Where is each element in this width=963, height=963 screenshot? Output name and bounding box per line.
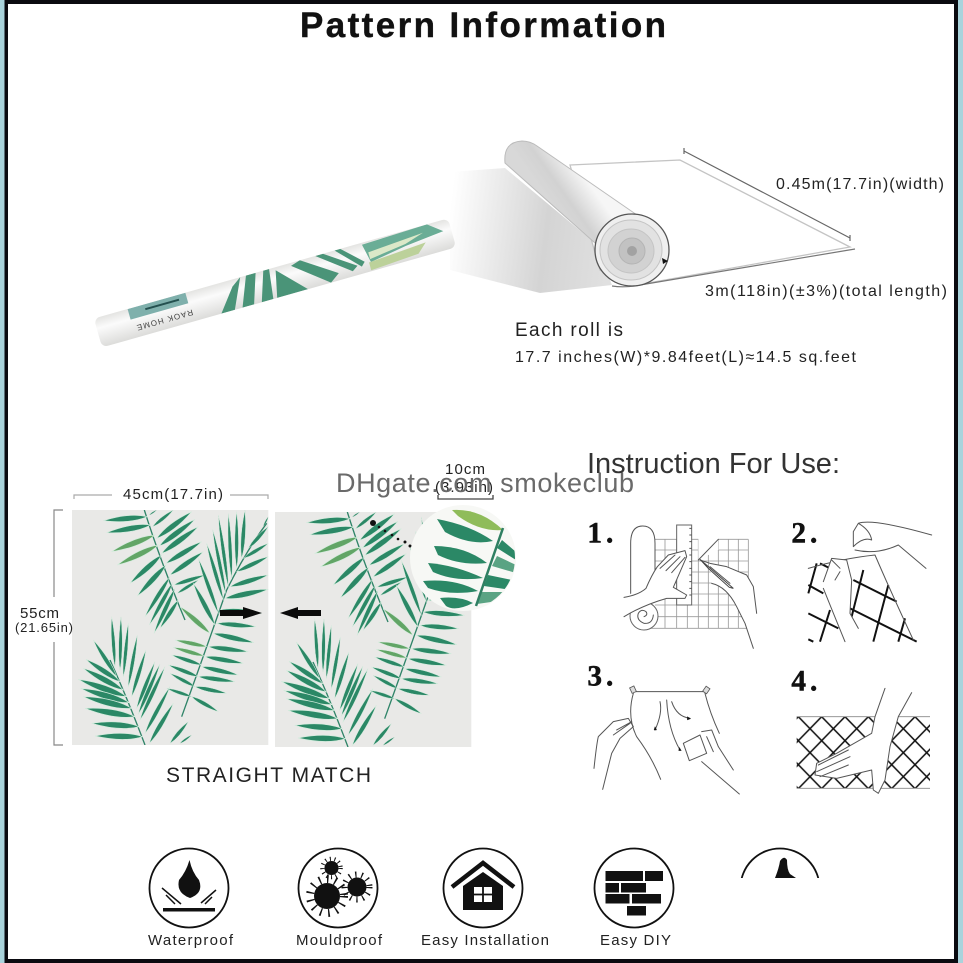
straight match wallpaper panels (72, 509, 473, 747)
dimension: 10cm sample (435, 461, 493, 499)
step 2 illustration: 2. (791, 518, 821, 550)
title: Pattern Information (300, 6, 666, 45)
dimension: 10cm sample: (3.93in) (435, 479, 493, 496)
roll label band (128, 293, 188, 320)
feature icon: mouldproof: Mouldproof (296, 932, 383, 949)
step 4 illustration: 4. (791, 665, 821, 697)
step 2 illustration (791, 518, 932, 642)
feature icon: waterproof: Waterproof (148, 932, 234, 949)
step 3 illustration: 3. (587, 660, 617, 692)
instruction steps (587, 518, 932, 794)
instructions heading: Instruction For Use: (587, 448, 840, 480)
step 4 illustration (791, 665, 930, 793)
product roll photo (94, 218, 456, 347)
roll direction arrow (662, 258, 668, 264)
dimension: 55cm height (15, 510, 73, 745)
roll size summary: Each roll is (515, 320, 623, 341)
unrolled sheet diagram (450, 141, 855, 293)
right panel (275, 511, 473, 747)
sheet front edge (612, 249, 855, 287)
sheet (570, 160, 850, 285)
roll size summary (515, 320, 857, 366)
roll size summary: 17.7 inches(W)*9.84feet(L)≈14.5 sq.feet (515, 349, 857, 366)
arrow right (220, 607, 262, 619)
feature icon: cropped fifth icon (740, 848, 820, 878)
feature icon: mouldproof (296, 848, 383, 949)
width label: 0.45m(17.7in)(width) (776, 176, 944, 193)
roll label brand text: RAOK HOME (136, 308, 194, 332)
dimension: 55cm height: (21.65in) (15, 620, 73, 635)
dimension: 10cm sample: 10cm (445, 461, 485, 478)
step 1 illustration: 1. (587, 518, 617, 550)
left panel (72, 509, 270, 745)
feature icon: easy diy (594, 848, 674, 949)
roll leaf print (213, 221, 448, 314)
roll body (505, 141, 637, 243)
width measure line (684, 148, 850, 241)
watermark: DHgate.com smokeclub (336, 468, 634, 498)
feature icon: easy installation (421, 848, 549, 949)
straight match caption: STRAIGHT MATCH (166, 764, 371, 787)
magnifier dotted leader (370, 520, 412, 548)
floor shadow (450, 168, 612, 293)
roll end (595, 214, 669, 286)
feature icon: easy diy: Easy DIY (600, 932, 671, 949)
length label: 3m(118in)(±3%)(total length) (705, 283, 947, 300)
magnifier circle (410, 505, 516, 611)
dimension: 55cm height: 55cm (20, 605, 59, 622)
step 1 illustration (587, 518, 770, 648)
dimension: 45cm width: 45cm(17.7in) (123, 486, 223, 503)
arrow left (280, 607, 321, 619)
step 3 illustration (587, 660, 739, 794)
dimension: 45cm width (74, 486, 268, 503)
feature icon: easy installation: Easy Installation (421, 932, 549, 949)
feature icon: waterproof (148, 848, 234, 949)
